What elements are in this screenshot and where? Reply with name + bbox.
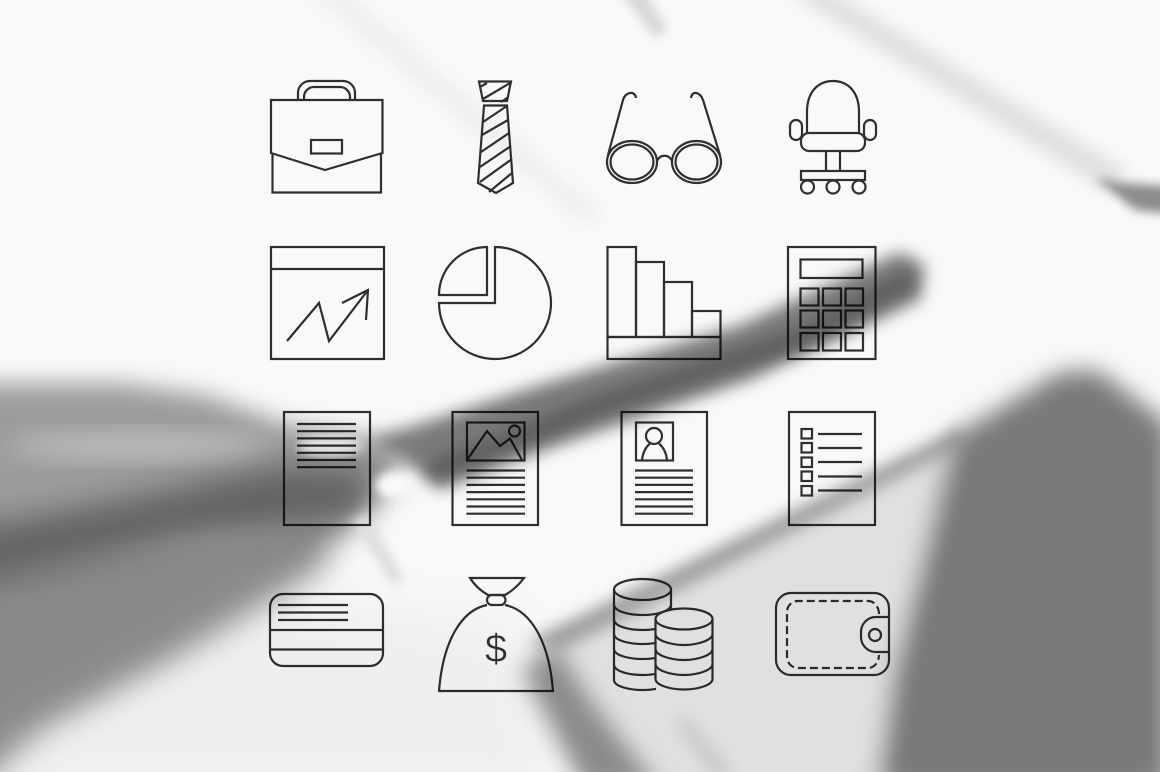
- icon: text document: [284, 412, 370, 525]
- icon: briefcase: [271, 81, 382, 192]
- icon: wallet: [776, 593, 889, 675]
- icon: credit card: [270, 594, 383, 666]
- icon: round glasses: [607, 93, 721, 183]
- icon: descending bar chart: [608, 247, 720, 359]
- icon: document with picture: [452, 412, 538, 525]
- icon: calculator: [788, 247, 876, 359]
- dollar sign: $: [485, 627, 507, 671]
- icon: coin stacks: [614, 579, 712, 690]
- icon: pie chart: [439, 247, 551, 359]
- icon: striped necktie: [478, 82, 513, 193]
- icon: growth chart window: [271, 247, 384, 359]
- icon: money bag: [439, 578, 553, 691]
- icon: checklist document: [789, 412, 875, 525]
- icon: office chair: [790, 81, 876, 194]
- icon: resume document with portrait: [622, 412, 707, 525]
